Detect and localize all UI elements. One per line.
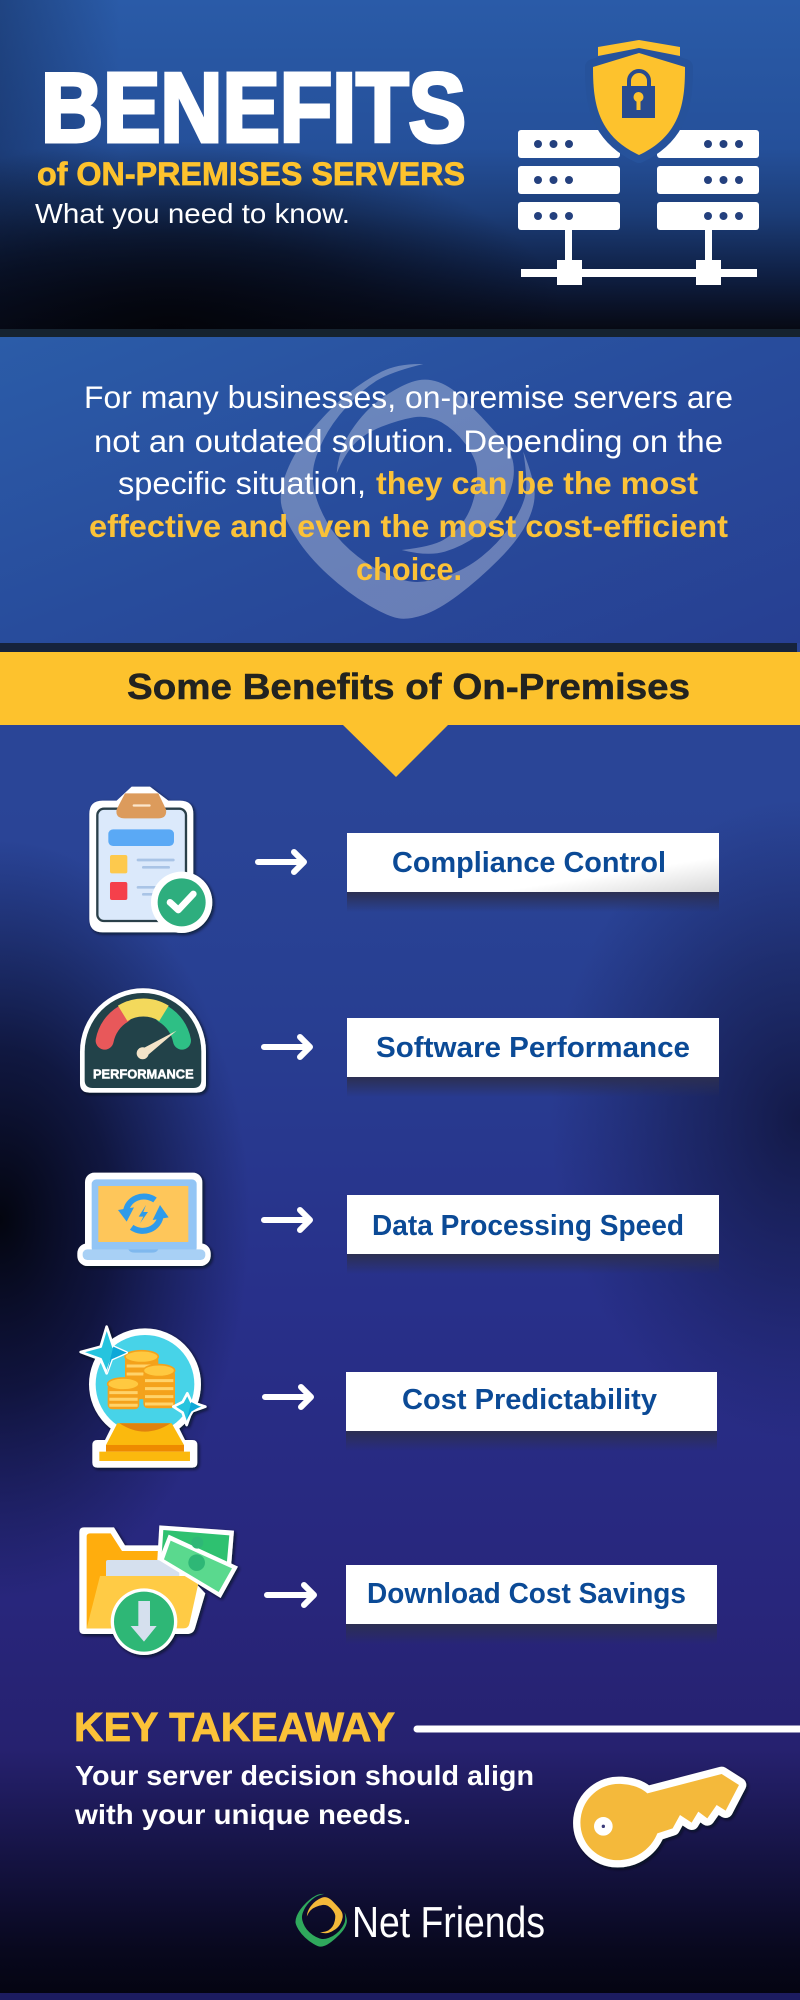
text: intro paragraph: For many businesses, on-premise servers are: [84, 379, 733, 415]
label box: Data Processing Speed: [372, 1210, 684, 1242]
text: intro paragraph: not an outdated solution. Depending on the: [94, 423, 723, 459]
arrow: [267, 1585, 314, 1605]
text: intro paragraph: they can be the most: [376, 465, 699, 501]
footer band: [0, 1993, 800, 2000]
arrow: [258, 852, 304, 872]
wordmark: Net Friends: [352, 1898, 545, 1947]
label box: [347, 833, 719, 912]
label box: [346, 1372, 717, 1451]
row: cost predictability: [81, 1327, 717, 1468]
text: takeaway: with your unique needs.: [74, 1799, 411, 1830]
subtitle: of on-premises servers: of ON-PREMISES SERVERS: [37, 156, 465, 192]
icon: folder with money: [79, 1525, 238, 1655]
text: intro paragraph: [84, 379, 733, 587]
banner: some benefits: [0, 643, 800, 777]
label box: Software Performance: [376, 1032, 690, 1064]
row: data processing speed: [77, 1173, 719, 1274]
divider line: [417, 1726, 800, 1732]
text: takeaway: [74, 1760, 534, 1830]
arrow: [264, 1210, 310, 1230]
icon: clipboard: [89, 787, 212, 933]
tagline: What you need to know.: [35, 198, 350, 229]
label box: Compliance Control: [392, 847, 666, 879]
icon: key: [580, 1774, 739, 1860]
icon: servers with shield: [518, 40, 759, 285]
logo: Net Friends: [295, 1894, 545, 1947]
panel: key takeaway: [74, 1704, 800, 1860]
label box: Download Cost Savings: [367, 1578, 686, 1610]
arrow: [264, 1037, 310, 1057]
text: intro paragraph: specific situation,: [118, 465, 366, 501]
title: BENEFITS: BENEFITS: [41, 52, 466, 162]
watermark: swirl logo: [281, 364, 535, 619]
text: intro paragraph: effective and even the most cost-efficient: [89, 508, 729, 544]
background shading: [0, 790, 800, 1600]
icon: performance gauge: PERFORMANCE: [93, 1066, 194, 1081]
row: compliance control: [89, 787, 719, 933]
heading: key takeaway: KEY TAKEAWAY: [74, 1704, 395, 1750]
icon: performance gauge: [80, 988, 206, 1093]
arrow: [265, 1387, 311, 1407]
panel: intro: [0, 337, 800, 643]
label box: [347, 1018, 719, 1097]
text: intro paragraph: choice.: [356, 551, 462, 587]
row: download cost savings: [79, 1525, 717, 1655]
label box: Cost Predictability: [402, 1384, 657, 1416]
icon: laptop: [77, 1173, 211, 1266]
icon: logo swirl: [295, 1894, 347, 1947]
icon: crystal ball with coins: [81, 1327, 205, 1468]
text: takeaway: Your server decision should align: [75, 1760, 534, 1791]
row: software performance: [80, 988, 719, 1097]
label box: [346, 1565, 717, 1644]
label box: [347, 1195, 719, 1274]
heading: Some Benefits of On-Premises: [127, 666, 690, 707]
panel: header: [0, 0, 800, 337]
